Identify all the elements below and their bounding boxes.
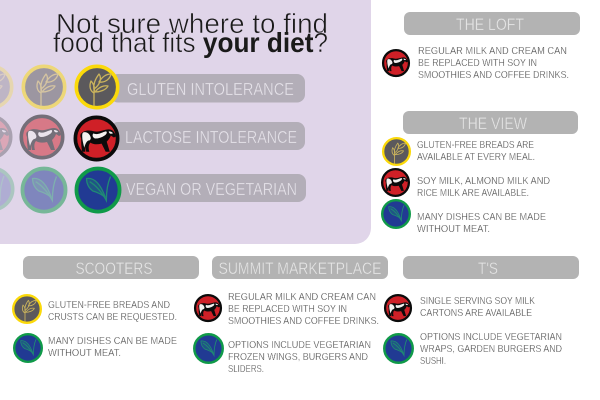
icon: faded gluten [23, 66, 65, 108]
text: t's milk: SINGLE SERVING SOY MILK [420, 296, 535, 307]
icon: faint gluten [0, 66, 12, 108]
text: view milk: SOY MILK, ALMOND MILK AND [417, 176, 550, 187]
label: lactose intolerance [110, 122, 305, 150]
icon: cow [382, 169, 409, 196]
icon: leaf [382, 200, 410, 228]
icon: leaf [194, 334, 223, 363]
icon: faded leaf [22, 168, 66, 212]
text: scooters gluten: CRUSTS CAN BE REQUESTED. [48, 312, 177, 323]
icon: gluten [76, 66, 118, 108]
text: view vegan: WITHOUT MEAT. [417, 224, 490, 235]
icon: leaf [14, 334, 42, 362]
heading: the loft: THE LOFT [456, 15, 524, 34]
panel: summit marketplace [194, 256, 388, 375]
text: t's milk: CARTONS ARE AVAILABLE [420, 308, 532, 319]
text: summit vegetarian: FROZEN WINGS, BURGERS AND [228, 352, 368, 363]
label: vegan or vegetarian [110, 174, 306, 202]
heading: summit marketplace: SUMMIT MARKETPLACE [218, 259, 382, 278]
text: view vegan [417, 212, 546, 235]
icon: leaf [384, 334, 413, 363]
heading: the loft [404, 12, 580, 35]
text: scooters gluten: GLUTEN-FREE BREADS AND [48, 300, 170, 311]
text: view gluten [417, 140, 535, 163]
text: t's vegetarian: OPTIONS INCLUDE VEGETARIAN [420, 332, 562, 343]
text: loft milk: REGULAR MILK AND CREAM CAN [418, 46, 567, 57]
icon: faint cow [0, 116, 11, 158]
text: summit vegetarian: SLIDERS. [228, 364, 264, 375]
text: loft milk: SMOOTHIES AND COFFEE DRINKS. [418, 70, 569, 81]
text: view gluten: GLUTEN-FREE BREADS ARE [417, 140, 534, 151]
heading: scooters: SCOOTERS [76, 259, 152, 278]
label: gluten intolerance [110, 74, 305, 102]
panel: t's [384, 256, 579, 367]
text: loft milk [418, 46, 569, 81]
text: view gluten: AVAILABLE AT EVERY MEAL. [417, 152, 535, 163]
panel: scooters [13, 256, 199, 362]
text: summit milk: REGULAR MILK AND CREAM CAN [228, 292, 376, 303]
text: summit milk: BE REPLACED WITH SOY IN [228, 304, 347, 315]
title: food that fits your diet? [53, 27, 328, 58]
text: scooters vegan [48, 336, 177, 359]
text: view milk [417, 176, 550, 199]
panel: diet key [0, 0, 371, 244]
text: t's vegetarian [420, 332, 562, 367]
icon: cow [385, 295, 411, 321]
icon: faint leaf [0, 168, 13, 210]
icon: leaf [76, 168, 120, 212]
icon: gluten [383, 138, 410, 165]
icon: cow [383, 50, 409, 76]
icon: cow [195, 295, 221, 321]
label: gluten intolerance: GLUTEN INTOLERANCE [127, 79, 294, 99]
heading: scooters [23, 256, 199, 279]
text: summit milk [228, 292, 379, 327]
label: lactose intolerance: LACTOSE INTOLERANCE [125, 127, 297, 147]
text: scooters vegan: MANY DISHES CAN BE MADE [48, 336, 177, 347]
heading: the view: THE VIEW [459, 114, 527, 133]
heading: the view [403, 111, 578, 134]
heading: t's: T'S [478, 259, 498, 278]
text: view vegan: MANY DISHES CAN BE MADE [417, 212, 546, 223]
label: vegan or vegetarian: VEGAN OR VEGETARIAN [126, 179, 297, 199]
text: summit milk: SMOOTHIES AND COFFEE DRINKS. [228, 316, 379, 327]
heading: t's [403, 256, 579, 279]
text: summit vegetarian: OPTIONS INCLUDE VEGETARIAN [228, 340, 371, 351]
text: t's vegetarian: SUSHI. [420, 356, 446, 367]
text: scooters vegan: WITHOUT MEAT. [48, 348, 121, 359]
text: t's milk [420, 296, 535, 319]
title: Not sure where to find [56, 8, 328, 39]
icon: gluten [13, 295, 41, 323]
text: scooters gluten [48, 300, 177, 323]
panel: the view [382, 111, 578, 235]
text: t's vegetarian: WRAPS, GARDEN BURGERS AND [420, 344, 562, 355]
panel: the loft [383, 12, 580, 81]
text: summit vegetarian [228, 340, 371, 375]
text: loft milk: BE REPLACED WITH SOY IN [418, 58, 537, 69]
icon: cow [75, 117, 118, 160]
text: view milk: RICE MILK ARE AVAILABLE. [417, 188, 529, 199]
icon: faded cow [21, 116, 63, 158]
title [53, 8, 328, 58]
